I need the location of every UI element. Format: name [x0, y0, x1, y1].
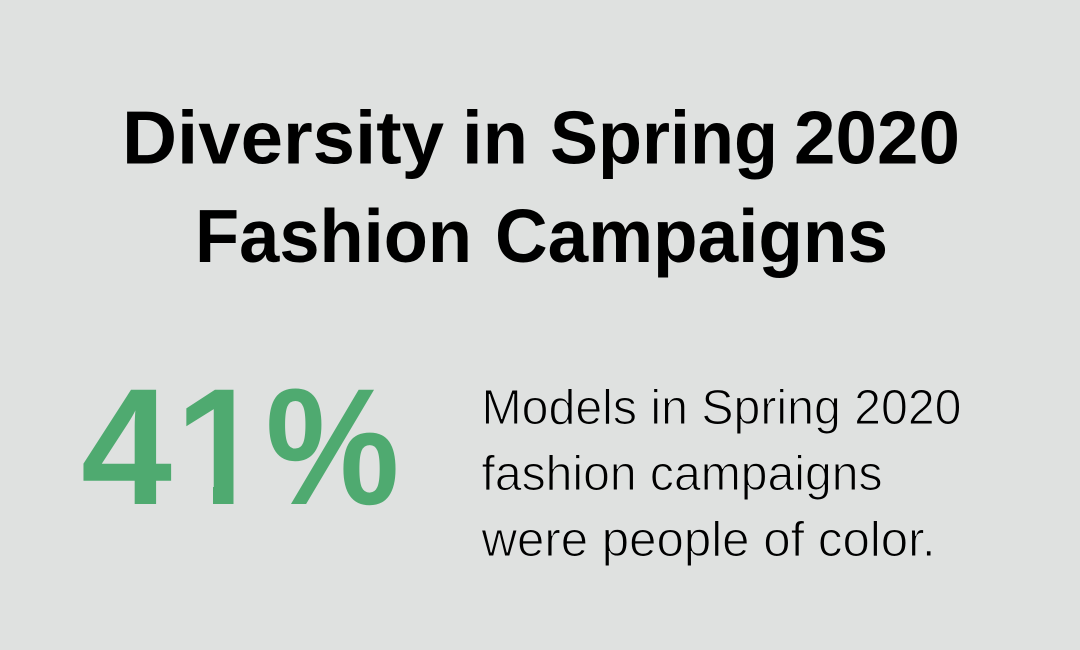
title: Diversity [122, 96, 444, 180]
title: in [462, 96, 528, 180]
title: Spring [550, 96, 778, 180]
statistic description: Models in Spring 2020 [482, 380, 962, 435]
title [122, 96, 960, 278]
statistic: 41%: 1 [175, 355, 267, 540]
title: Campaigns [495, 194, 888, 278]
infographic canvas [84, 109, 959, 566]
statistic: 41%: % [266, 355, 400, 540]
title: 2020 [794, 96, 960, 180]
statistic: 41% [84, 388, 396, 506]
statistic description [481, 380, 962, 567]
statistic description: were people of color. [481, 512, 936, 567]
title: Fashion [195, 194, 472, 278]
statistic description: fashion campaigns [482, 446, 882, 501]
statistic: 41%: 4 [81, 355, 172, 540]
